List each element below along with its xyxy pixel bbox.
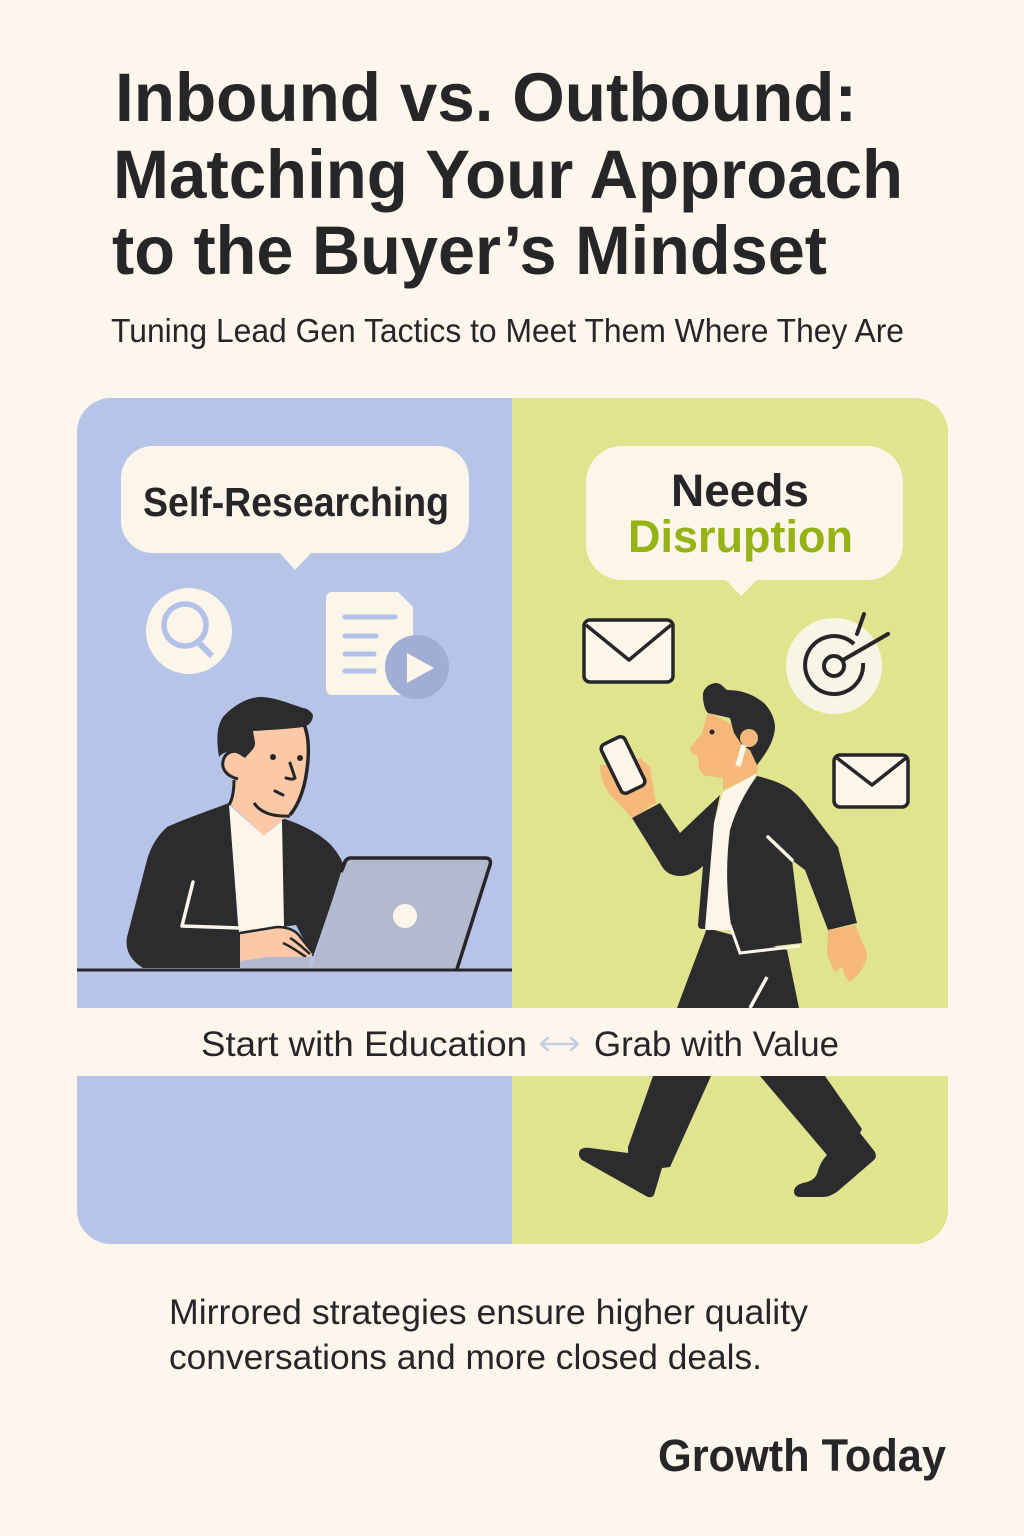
illustration: man at laptop bbox=[127, 697, 490, 969]
phone bbox=[599, 735, 647, 795]
laptop bbox=[311, 858, 490, 969]
desk line bbox=[77, 968, 512, 972]
hand bbox=[240, 927, 313, 961]
illustration: walking man with phone bbox=[579, 683, 876, 1197]
speech bubble: self-researching bbox=[121, 446, 469, 570]
sleeve line bbox=[182, 882, 240, 928]
speech bubble: needs disruption: Needs bbox=[671, 465, 809, 516]
neck and face bbox=[230, 724, 309, 836]
shirt bbox=[703, 773, 757, 930]
subtitle: Tuning Lead Gen Tactics to Meet Them Where They Are bbox=[111, 312, 904, 349]
icon: magnifying glass bbox=[146, 588, 232, 674]
icon: target with arrow bbox=[786, 614, 888, 714]
jacket bbox=[727, 776, 857, 950]
upper legs bbox=[677, 928, 799, 1008]
panel: needs disruption background bbox=[512, 398, 948, 1244]
panel: split comparison bbox=[77, 398, 948, 1244]
hair bbox=[217, 697, 313, 758]
speech bubble: self-researching: Self-Researching bbox=[143, 479, 449, 525]
panel: self-researching background bbox=[77, 398, 512, 1244]
brand name: Growth Today bbox=[658, 1430, 946, 1481]
right hand bbox=[827, 925, 867, 982]
shirt bbox=[229, 805, 284, 932]
title: Matching Your Approach bbox=[113, 136, 903, 213]
hair bbox=[703, 683, 775, 765]
ear bbox=[740, 729, 758, 747]
band: strategy comparison: Start with Education bbox=[201, 1025, 527, 1064]
ear bbox=[223, 751, 244, 779]
closing statement: conversations and more closed deals. bbox=[169, 1338, 762, 1377]
title: Inbound vs. Outbound: bbox=[115, 59, 857, 136]
icon: double arrow bbox=[541, 1038, 578, 1050]
eyes, nose and mouth bbox=[270, 754, 303, 795]
speech bubble: needs disruption bbox=[586, 446, 903, 596]
arm and jacket left panel bbox=[632, 795, 720, 929]
face bbox=[690, 712, 760, 790]
title bbox=[112, 59, 903, 289]
left hand bbox=[600, 758, 656, 818]
closing statement: Mirrored strategies ensure higher quality bbox=[169, 1293, 808, 1332]
lower right leg bbox=[760, 1076, 876, 1197]
icon: large envelope bbox=[584, 620, 673, 682]
closing statement bbox=[169, 1293, 808, 1377]
jacket right bbox=[282, 818, 344, 957]
band: strategy comparison bbox=[77, 1008, 948, 1076]
speech bubble: needs disruption: Disruption bbox=[628, 511, 853, 562]
earbud bbox=[738, 745, 744, 766]
jacket left bbox=[127, 803, 240, 968]
band: strategy comparison: Grab with Value bbox=[594, 1025, 839, 1064]
lower left leg bbox=[579, 1076, 711, 1197]
title: to the Buyer’s Mindset bbox=[112, 212, 827, 289]
icon: document with play button bbox=[326, 592, 449, 699]
icon: small envelope bbox=[834, 755, 908, 807]
